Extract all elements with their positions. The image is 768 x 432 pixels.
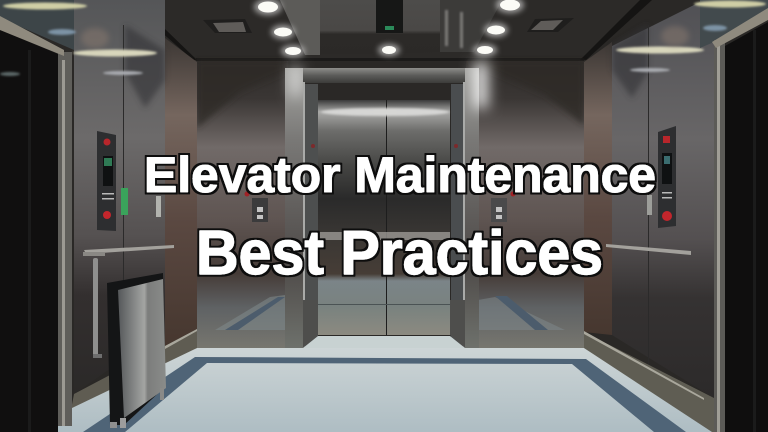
wall shadow and glow left: [197, 61, 584, 128]
waste bin: [107, 273, 166, 428]
title line 1: Elevator Maintenance: [144, 147, 656, 203]
ceiling display: [376, 0, 403, 33]
floor: [22, 348, 712, 432]
ceiling: [125, 0, 652, 61]
reflected floor stripe right: [478, 297, 565, 330]
ceiling vent right: [527, 18, 574, 32]
right elevator opening: [712, 8, 768, 432]
small white switch: [156, 196, 161, 217]
steel columns beside door: [285, 68, 479, 348]
right wall intercom: [491, 192, 516, 222]
title: [144, 147, 656, 288]
right wall panel seams and reflections: [612, 24, 704, 370]
back wall left: [196, 61, 288, 348]
left handrail: [83, 245, 174, 358]
left wall panel seams and reflections: [73, 25, 165, 370]
title line 2: Best Practices: [196, 219, 603, 288]
ceiling vent left: [203, 19, 252, 33]
upper left steel band: [0, 0, 87, 50]
central elevator door: [303, 68, 465, 348]
reflected floor stripe left: [215, 295, 285, 330]
left wall brown section: [165, 38, 197, 346]
left call panel: [97, 131, 116, 231]
left elevator opening: [0, 16, 72, 432]
back wall right: [466, 61, 584, 348]
door indicator lights: [311, 144, 458, 148]
ceiling lights: [254, 0, 524, 57]
light glow over door: [291, 62, 488, 108]
left wall intercom: [244, 192, 268, 222]
upper right steel band: [694, 0, 768, 48]
right handrail: [606, 244, 691, 255]
right call panel: [658, 126, 676, 228]
left side wall: [74, 0, 165, 394]
right skirting: [584, 332, 714, 432]
right wall brown section: [584, 42, 612, 335]
right side wall: [612, 0, 714, 398]
green exit indicator: [121, 188, 128, 215]
floor border strip: [83, 336, 686, 432]
right wall switch: [647, 195, 652, 215]
left skirting: [68, 329, 197, 426]
